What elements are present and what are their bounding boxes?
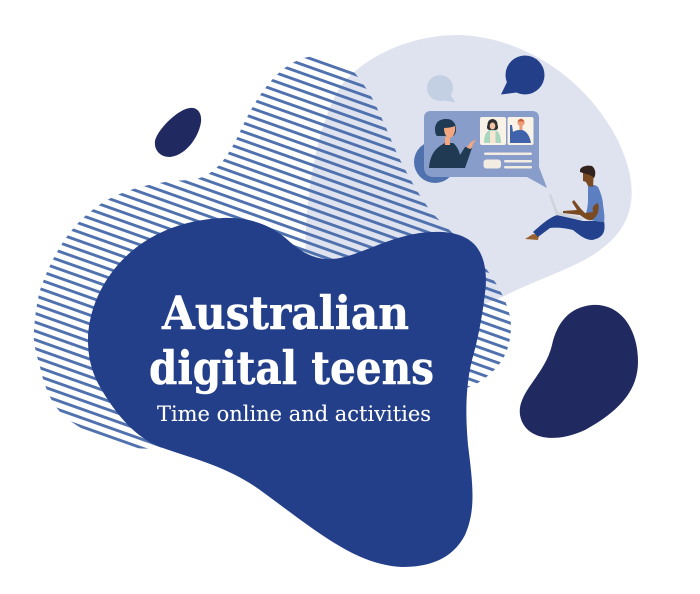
- hair: [580, 166, 595, 178]
- icon: dark speech bubble: [501, 56, 544, 94]
- subtitle: Time online and activities: [157, 402, 431, 426]
- trousers: [533, 215, 605, 240]
- circle behind bubble: [414, 141, 456, 183]
- title line 2: digital teens: [149, 341, 434, 395]
- title line 1: Australian: [161, 286, 409, 340]
- striped background blob: [34, 56, 511, 449]
- head: [583, 170, 594, 187]
- arm and hands: [563, 200, 599, 220]
- title: [149, 286, 434, 426]
- thumbnail: man waving: [508, 117, 534, 145]
- main blue blob: [88, 218, 486, 567]
- thumbnail: woman: [480, 117, 506, 145]
- icon: pale speech bubble: [427, 75, 455, 102]
- laptop: [549, 194, 583, 220]
- small dark blob: [155, 108, 201, 157]
- figure: person on laptop: [525, 166, 605, 240]
- large dark blob: [520, 305, 638, 438]
- light speech-shaped blob: [306, 35, 632, 310]
- woman presenter: [429, 119, 476, 168]
- video call bubble: [414, 111, 547, 188]
- text lines: [484, 152, 532, 168]
- shirt: [585, 185, 604, 222]
- bubble card: [424, 111, 547, 188]
- foot: [525, 234, 539, 240]
